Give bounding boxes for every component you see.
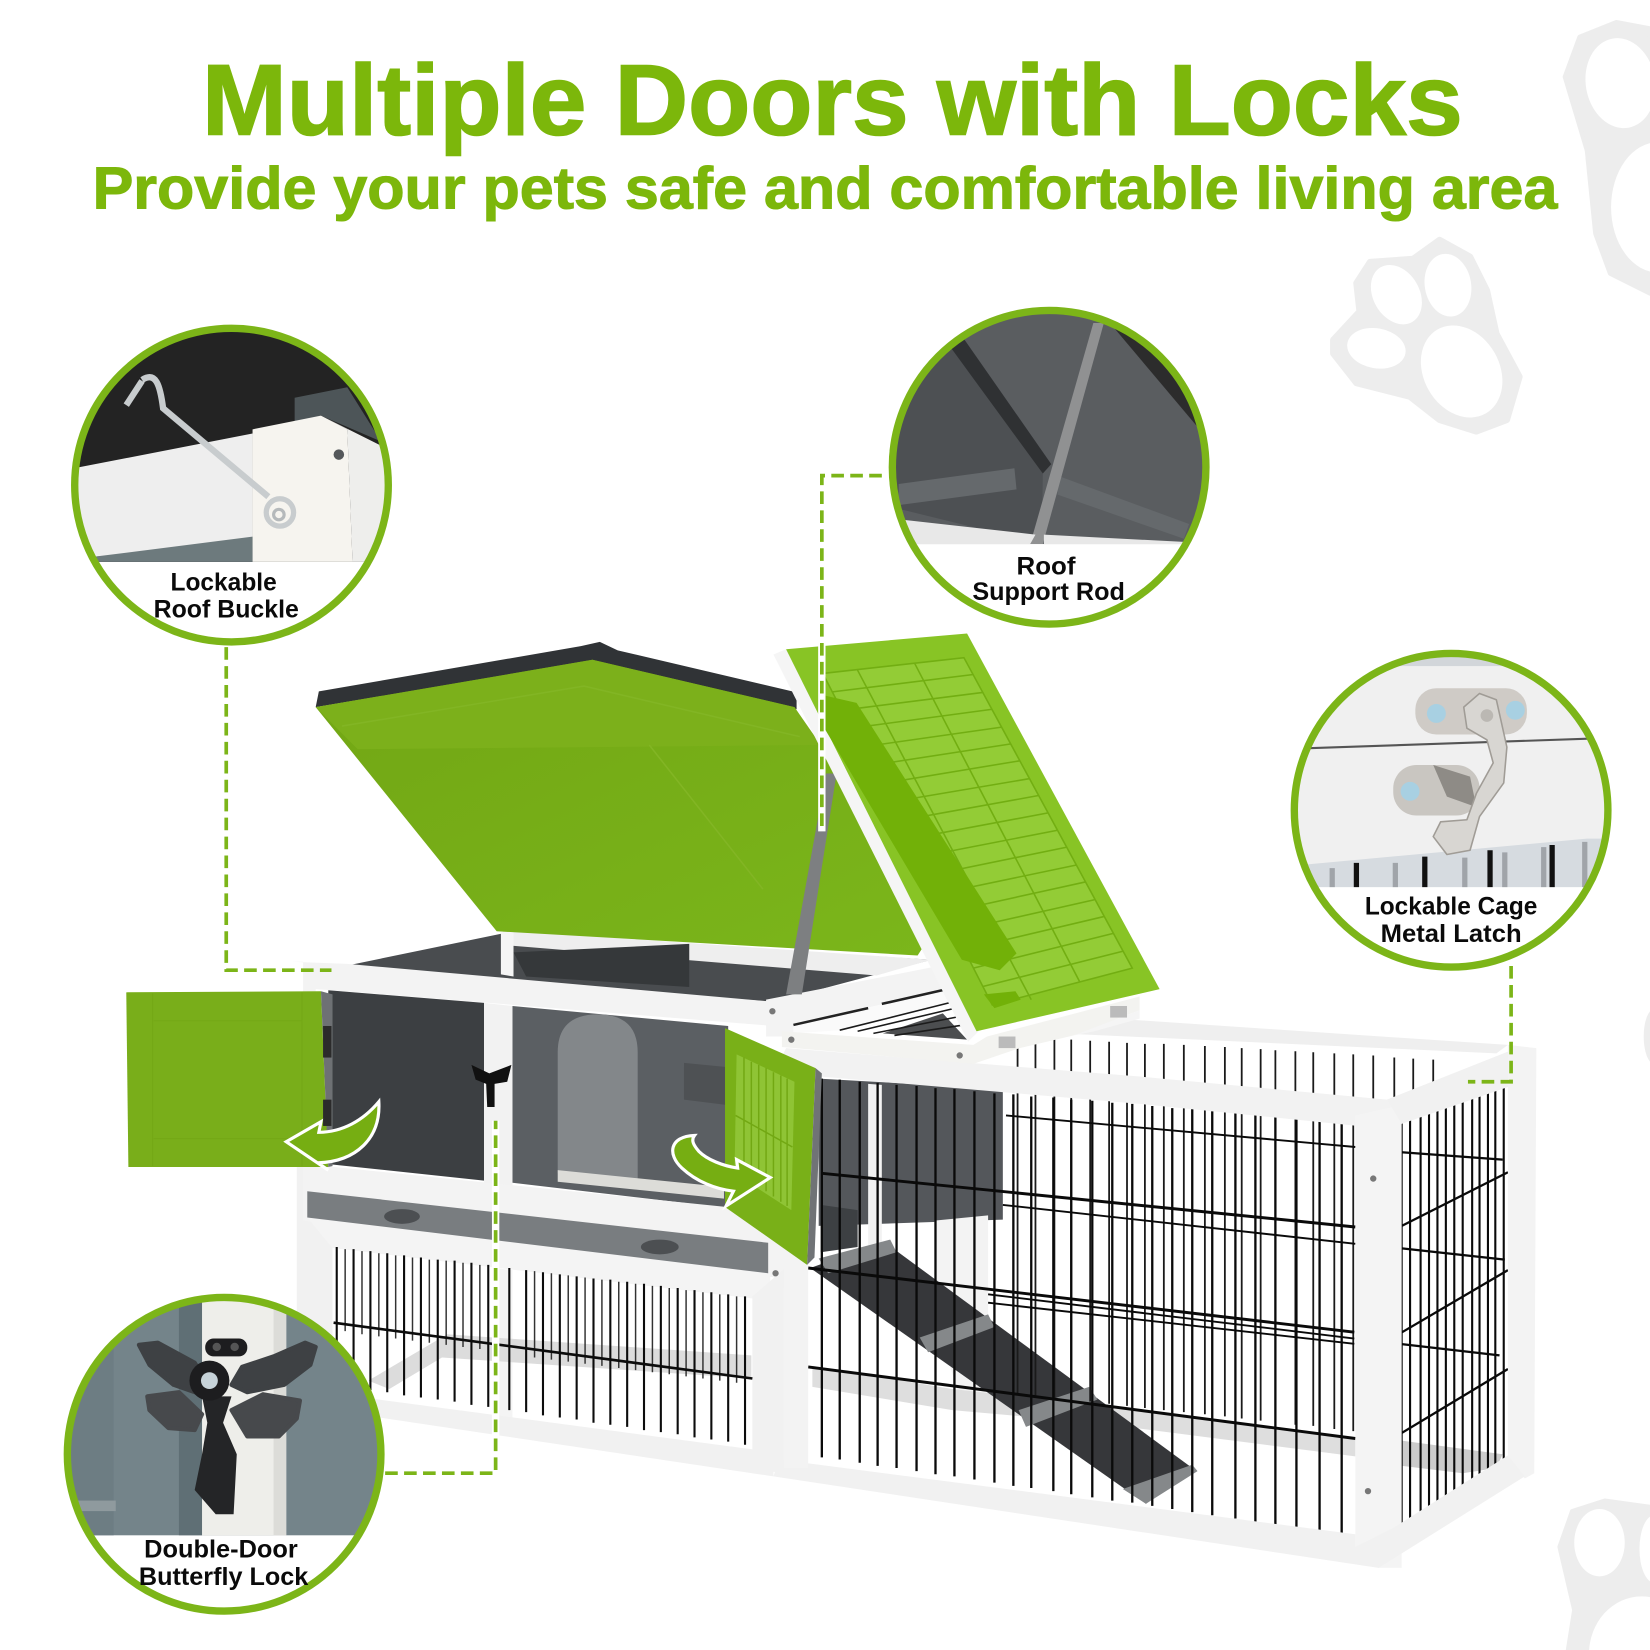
- open side lid: [773, 633, 1160, 1042]
- title: Multiple Doors with Locks: [202, 46, 1463, 157]
- caption: Double-Door: [144, 1535, 298, 1563]
- dashed connector: metal latch: [1468, 966, 1511, 1082]
- caption: Roof: [1017, 553, 1076, 581]
- hutch interior top: [335, 930, 931, 1002]
- small butterfly lock on hutch: [471, 1065, 511, 1107]
- callout: lockable roof buckle: [63, 316, 400, 642]
- caption: Lockable Cage: [1365, 892, 1537, 920]
- background paw prints: [1333, 22, 1650, 1650]
- cage floor shadow: [812, 1366, 1503, 1473]
- arrow: right door swing: [673, 1135, 770, 1206]
- caption line 2: Support Rod: [972, 578, 1125, 606]
- callout: roof support rod: [884, 305, 1221, 624]
- caption: Lockable: [170, 568, 277, 596]
- dashed connector: roof buckle: [226, 647, 331, 970]
- subtitle: Provide your pets safe and comfortable living area: [93, 156, 1559, 221]
- callout: double-door butterfly lock: [63, 1292, 389, 1611]
- drawers: [307, 1191, 768, 1273]
- caption line 2: Roof Buckle: [154, 596, 299, 624]
- right lid base frame: [766, 967, 1140, 1064]
- right compartment: [512, 1006, 728, 1208]
- paw: bottom right: [1560, 1009, 1650, 1650]
- cage back rail: [1060, 1017, 1508, 1053]
- nest box behind cage: [819, 1079, 1003, 1400]
- cage front wire: [808, 1079, 1355, 1534]
- cage back wire: [1018, 1037, 1433, 1431]
- left hutch frame: [291, 962, 784, 1473]
- callout: lockable cage metal latch: [1289, 647, 1615, 967]
- cage white frame: [772, 1045, 1536, 1568]
- caption line 2: Metal Latch: [1381, 920, 1522, 948]
- dashed connector: support rod: [822, 476, 882, 831]
- arrow: left door swing: [286, 1102, 379, 1170]
- rabbit hutch illustration: [126, 633, 1536, 1568]
- lower left bottom beam: [337, 1395, 773, 1476]
- caption line 2: Butterfly Lock: [139, 1563, 309, 1591]
- left open door: [126, 991, 333, 1167]
- cage side wire: [1394, 1084, 1508, 1524]
- lower cage floor: [368, 1334, 751, 1389]
- dashed connector: butterfly lock: [385, 1121, 496, 1473]
- right open door: [725, 1028, 822, 1265]
- paw: top right: [1565, 22, 1650, 294]
- roof support rod: [786, 773, 837, 994]
- lower cage wire: [334, 1247, 752, 1445]
- main roof, open: [316, 642, 937, 955]
- paw: middle: [1333, 240, 1520, 432]
- left compartment: [326, 990, 484, 1181]
- ramp: [810, 1240, 1198, 1504]
